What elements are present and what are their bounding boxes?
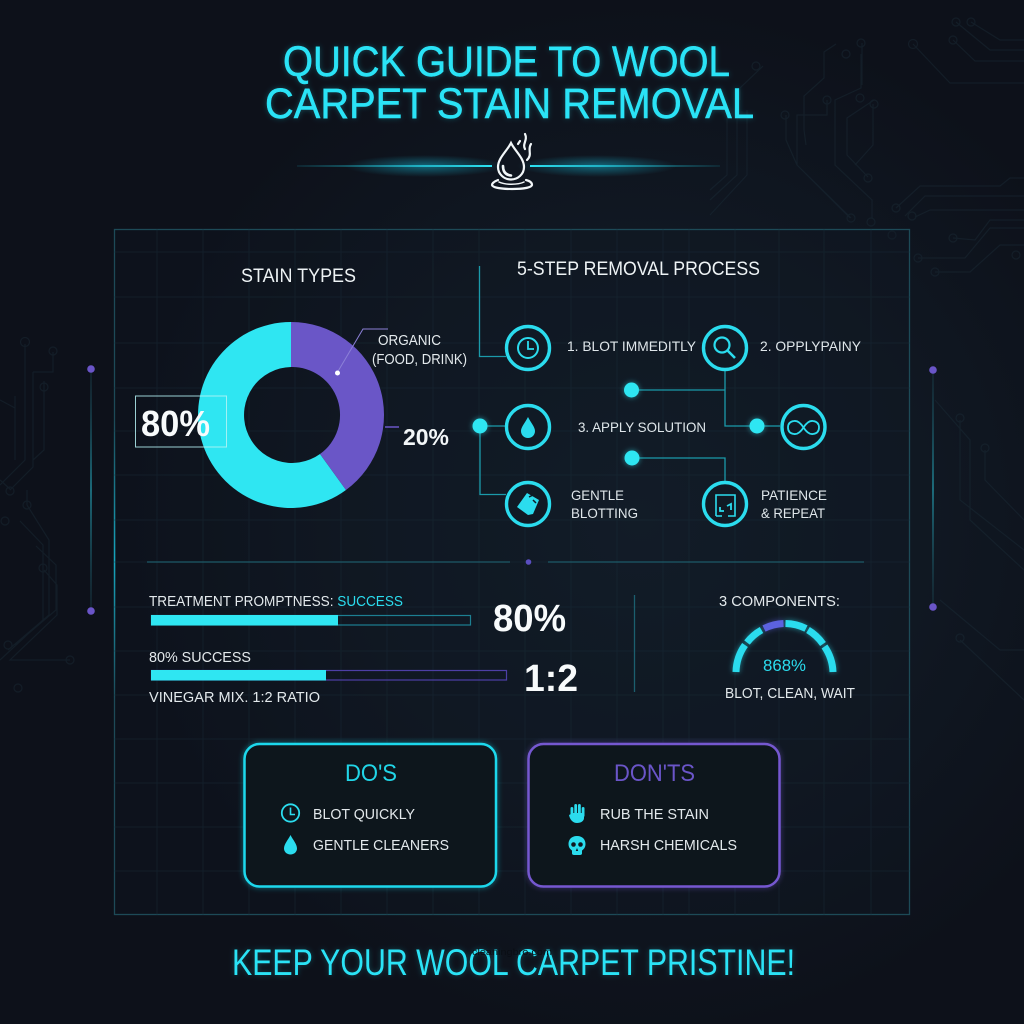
- organic callout: ORGANIC: [378, 333, 441, 349]
- components gauge: 868%: [763, 656, 806, 675]
- title divider with glow: [297, 155, 720, 177]
- step icon: infinity: [782, 406, 825, 448]
- vinegar mix bar: [149, 650, 506, 706]
- donut segment: purple: [291, 322, 384, 490]
- vinegar mix bar: VINEGAR MIX. 1:2 RATIO: [149, 690, 320, 706]
- step label: patience and repeat: & REPEAT: [761, 505, 825, 521]
- treatment promptness bar: [149, 594, 470, 626]
- icon: hand: [569, 804, 584, 823]
- 80 percent label: 80%: [141, 403, 210, 444]
- title: QUICK GUIDE TO WOOL: [283, 39, 730, 86]
- watermark: cleaningbro.com: [472, 947, 552, 958]
- treatment promptness bar: TREATMENT PROMPTNESS: SUCCESS: [149, 594, 403, 610]
- components gauge: BLOT, CLEAN, WAIT: [725, 686, 855, 702]
- step icon: patience and repeat: [704, 482, 746, 526]
- heading: 5-step removal process: 5-STEP REMOVAL PROCESS: [517, 259, 760, 280]
- step label: patience and repeat: PATIENCE: [761, 487, 827, 503]
- step 3 icon: drop: [506, 406, 550, 448]
- panel: don'ts: [528, 744, 780, 886]
- right side connector: [929, 366, 937, 611]
- process connector lines: [480, 266, 780, 494]
- icon: clock: [282, 804, 299, 822]
- left side connector: [87, 365, 95, 615]
- components gauge: [719, 594, 855, 702]
- 80 percent label: [136, 396, 226, 447]
- icon: skull: [568, 836, 586, 855]
- components gauge: 3 COMPONENTS:: [719, 594, 840, 610]
- title: [265, 39, 754, 128]
- main panel: [114, 229, 910, 915]
- organic callout: [335, 329, 467, 376]
- organic callout: (FOOD, DRINK): [372, 352, 467, 368]
- item: gentle cleaners: GENTLE CLEANERS: [313, 837, 449, 854]
- panel: do's: [244, 744, 496, 886]
- donut segment: cyan: [198, 322, 346, 508]
- heading: do's: DO'S: [345, 760, 397, 787]
- step 1 label: 1. BLOT IMMEDITLY: [567, 338, 697, 354]
- connector nodes: [472, 382, 764, 466]
- donut chart: [198, 322, 384, 508]
- step 2 label: 2. OPPLYPAINY: [760, 338, 862, 354]
- title: CARPET STAIN REMOVAL: [265, 81, 754, 128]
- footer slogan: KEEP YOUR WOOL CARPET PRISTINE!: [232, 942, 795, 983]
- item: rub the stain: RUB THE STAIN: [600, 806, 709, 823]
- step label: gentle blotting: GENTLE: [571, 487, 624, 503]
- vinegar mix bar: 80% SUCCESS: [149, 650, 251, 666]
- vertical divider: [634, 595, 636, 692]
- step label: gentle blotting: [571, 487, 638, 521]
- step 3 label: 3. APPLY SOLUTION: [578, 419, 706, 435]
- item: harsh chemicals: HARSH CHEMICALS: [600, 837, 737, 854]
- step icon: blotting cloth: [506, 482, 550, 526]
- step 2 icon: magnifier: [704, 326, 746, 370]
- section divider: [147, 559, 864, 565]
- stat: 80 percent: 80%: [493, 598, 566, 640]
- step label: gentle blotting: BLOTTING: [571, 505, 638, 521]
- item: blot quickly: BLOT QUICKLY: [313, 806, 415, 823]
- 20 percent label: 20%: [403, 424, 449, 450]
- heading: don'ts: DON'TS: [614, 760, 695, 787]
- icon: water drop with steam: [492, 134, 532, 189]
- heading: stain types: STAIN TYPES: [241, 266, 356, 287]
- stat: 1 to 2 ratio: 1:2: [524, 658, 578, 700]
- step 1 icon: clock: [506, 326, 550, 370]
- step label: patience and repeat: [761, 487, 827, 521]
- icon: drop: [284, 835, 297, 854]
